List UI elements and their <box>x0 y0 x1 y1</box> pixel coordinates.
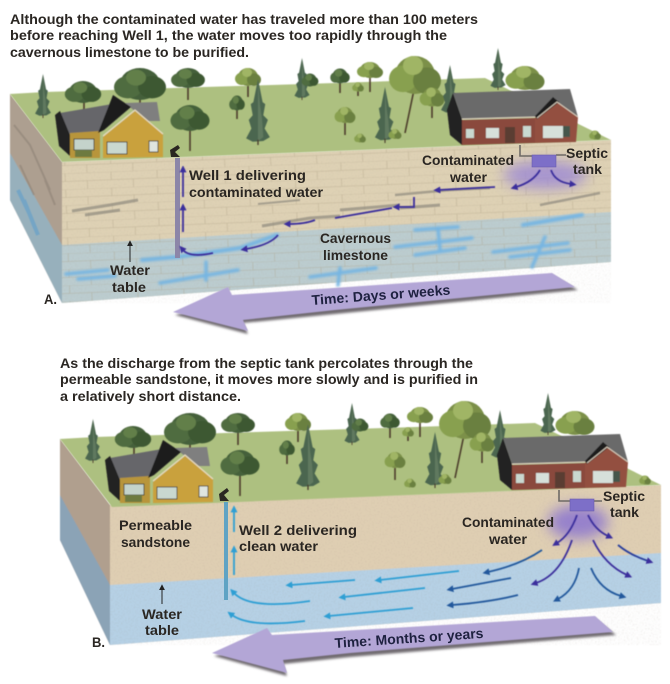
landscape: green surface, trees and houses A <box>10 48 611 162</box>
red house <box>447 89 578 145</box>
label: water table B: Water <box>142 606 183 622</box>
label: permeable sandstone: Permeable <box>119 517 192 533</box>
block faces A <box>10 94 611 303</box>
label: septic tank A: Septic <box>566 145 608 161</box>
surface: grass <box>10 78 611 162</box>
label: contaminated water A: water <box>449 169 488 185</box>
yellow house <box>55 95 163 158</box>
label: water table B <box>142 606 183 638</box>
label: contaminated water B: water <box>488 531 528 547</box>
heading: panel A caption: Although the contaminated water has traveled more than 100 meters <box>10 11 478 27</box>
label: septic tank A <box>566 145 608 177</box>
label: A: A. <box>44 291 57 307</box>
block faces B <box>60 439 661 645</box>
septic tank B <box>559 490 602 511</box>
heading: panel A caption <box>10 11 478 60</box>
heading: panel B caption <box>60 355 478 404</box>
flow arrows B: clean water toward well <box>232 511 459 623</box>
label: well 1: contaminated water <box>189 184 324 200</box>
trees <box>35 48 601 151</box>
label: cavernous limestone <box>320 230 391 263</box>
contamination plume A <box>503 161 587 189</box>
heading: panel A caption: before reaching Well 1, the water moves too rapidly through the <box>10 27 447 43</box>
well 1 pipe and cap <box>170 145 180 258</box>
cracks: dry limestone fissures A <box>72 188 600 226</box>
label: permeable sandstone <box>119 517 192 550</box>
heading: panel B caption: a relatively short distance. <box>60 388 241 404</box>
label: water table A <box>110 262 151 295</box>
label: contaminated water A <box>422 152 514 185</box>
label: septic tank B <box>603 488 645 520</box>
cavities: water-filled limestone channels A <box>66 215 582 285</box>
label: water table B: table <box>145 622 179 638</box>
label: well 1 <box>189 167 324 200</box>
heading: panel B caption: As the discharge from the septic tank percolates through the <box>60 355 473 371</box>
arrow: time days or weeks <box>173 273 578 334</box>
arrow: time months or years: Time: Months or years <box>334 625 484 651</box>
label: septic tank A: tank <box>573 161 602 177</box>
label: B: B. <box>92 634 105 650</box>
label: well 2: Well 2 delivering <box>239 522 357 538</box>
septic tank A <box>520 145 566 167</box>
label: water table A: Water <box>110 262 151 278</box>
flow arrows A: contaminated water <box>183 170 571 255</box>
label: well 2 <box>239 522 357 554</box>
panel A: limestone block diagram <box>10 48 611 334</box>
label: water table A: table <box>112 279 146 295</box>
well 2 pipe and cap <box>219 488 229 600</box>
label: permeable sandstone: sandstone <box>121 534 190 550</box>
label: contaminated water A: Contaminated <box>422 152 514 168</box>
label: well 2: clean water <box>239 538 319 554</box>
label: septic tank B: Septic <box>603 488 645 504</box>
water table pointer B <box>161 589 163 604</box>
label: contaminated water B <box>462 514 554 547</box>
label: well 1: Well 1 delivering <box>189 167 306 183</box>
label: cavernous limestone: Cavernous <box>320 230 391 246</box>
arrow: time months or years <box>212 616 616 676</box>
label: contaminated water B: Contaminated <box>462 514 554 530</box>
contamination plume B <box>548 505 608 539</box>
water table pointer A <box>129 245 131 262</box>
heading: panel B caption: permeable sandstone, it moves more slowly and is purified in <box>60 371 478 387</box>
label: cavernous limestone: limestone <box>323 247 388 263</box>
heading: panel A caption: cavernous limestone to be purified. <box>10 44 249 60</box>
landscape: green surface, trees and houses B <box>60 393 661 507</box>
label: septic tank B: tank <box>610 504 639 520</box>
arrow: time days or weeks: Time: Days or weeks <box>311 282 451 308</box>
panel B: sandstone block diagram <box>60 393 661 676</box>
flow arrows B: contaminated water near tank <box>452 515 648 605</box>
